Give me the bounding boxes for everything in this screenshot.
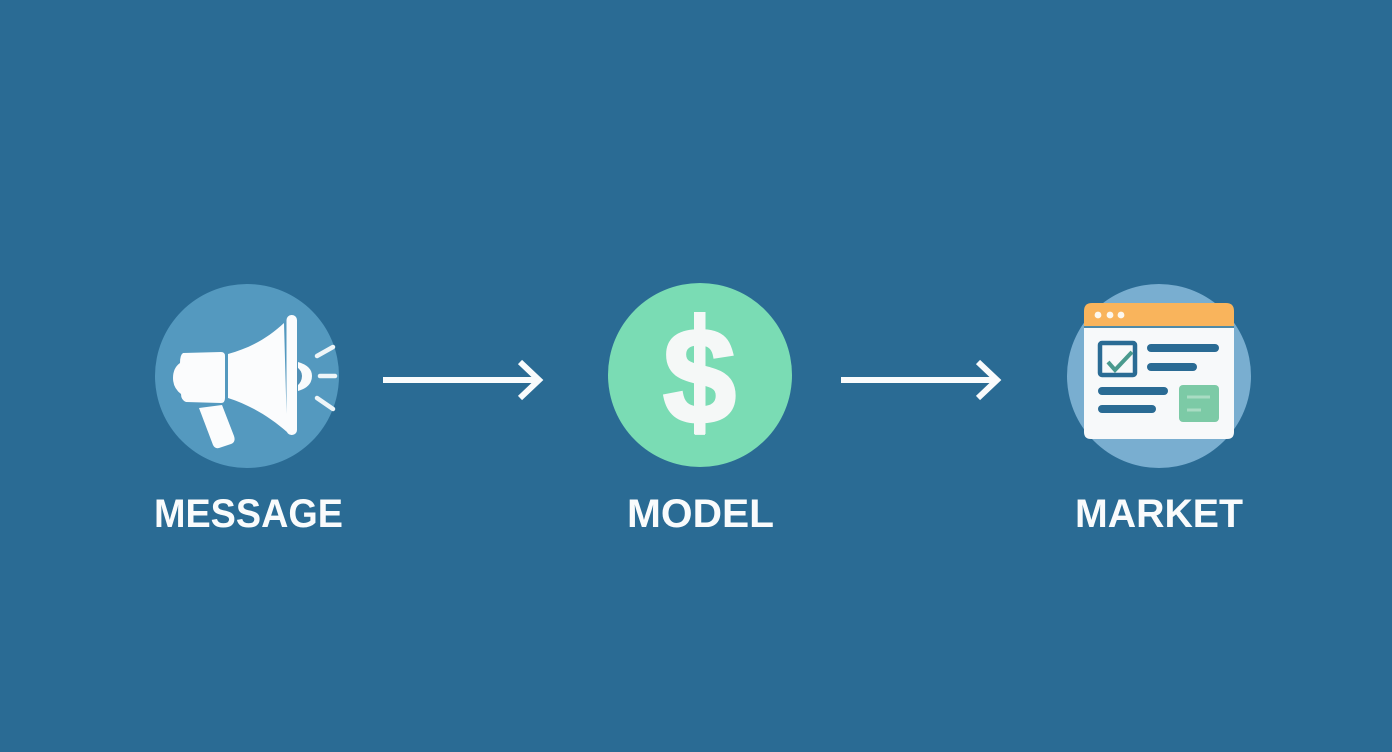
window header [1084,303,1234,326]
icon: browser window [1067,284,1251,468]
step: market [1067,284,1251,536]
green card [1179,385,1219,422]
icon: dollar coin [608,283,792,467]
arrow: model to market [841,362,997,398]
window body [1084,326,1234,439]
arrow: message to model [383,362,539,398]
step: message [154,284,343,536]
icon: dollar coin: $ [663,301,736,453]
label: model: MODEL [627,492,774,536]
label: message: MESSAGE [154,492,343,536]
text lines [1102,348,1215,409]
label: market: MARKET [1075,492,1243,536]
checkbox [1100,343,1135,375]
icon: megaphone [155,284,339,468]
step: model [608,283,792,536]
